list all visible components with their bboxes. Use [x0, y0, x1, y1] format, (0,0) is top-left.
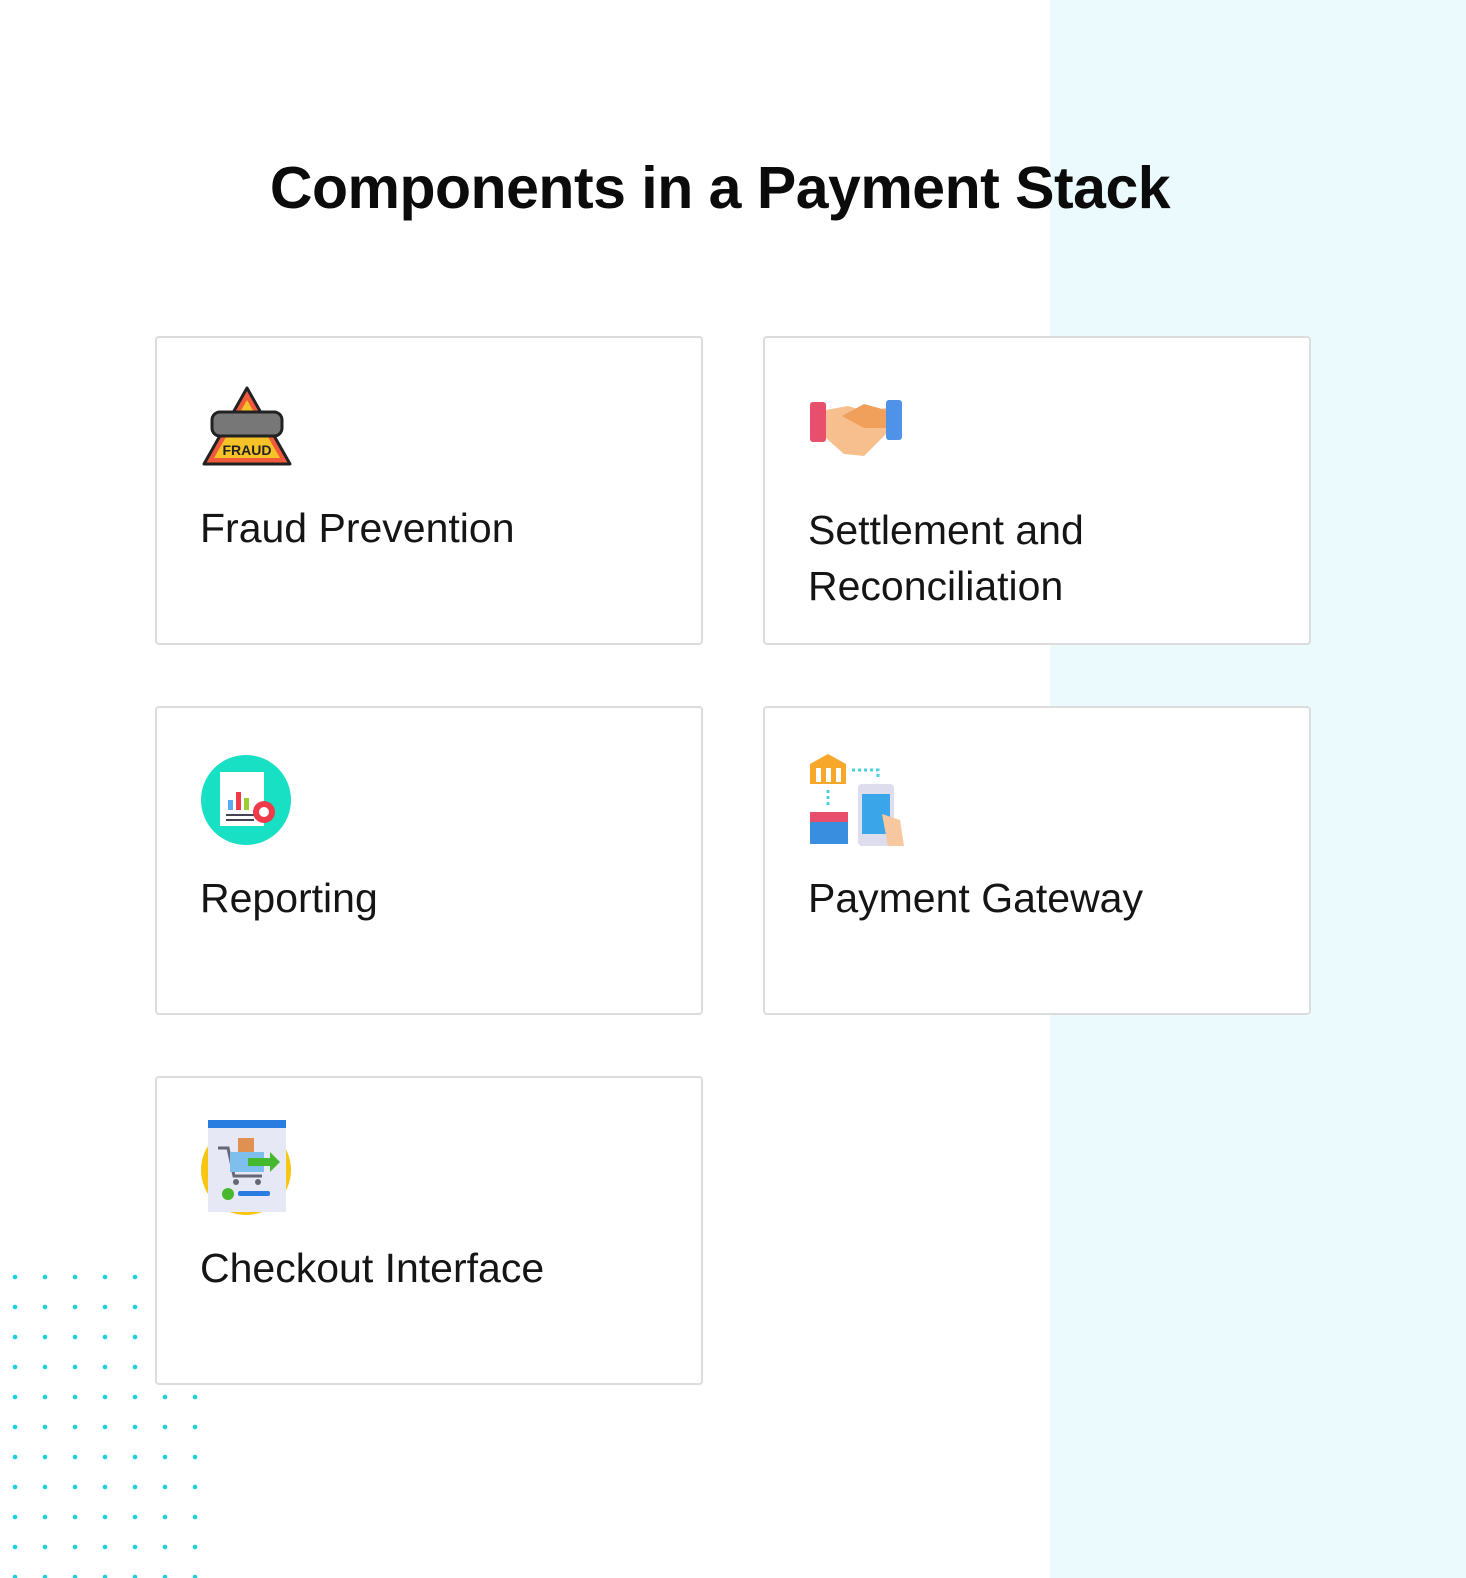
icon: report	[201, 755, 291, 845]
label: Checkout Interface	[200, 1245, 544, 1291]
label: Payment Gateway	[808, 875, 1143, 921]
panel: checkout interface	[155, 1076, 703, 1385]
panel: settlement	[763, 336, 1311, 645]
panel: reporting	[155, 706, 703, 1015]
label: Settlement and	[808, 507, 1084, 553]
icon: fraud sign	[202, 386, 292, 466]
title: Components in a Payment Stack	[270, 155, 1170, 221]
panel: fraud prevention	[155, 336, 703, 645]
icon: fraud sign: FRAUD	[222, 442, 272, 458]
label	[808, 507, 1084, 609]
label: Fraud Prevention	[200, 505, 515, 551]
label: Reconciliation	[808, 563, 1063, 609]
icon: handshake	[810, 400, 902, 456]
icon: gateway	[810, 754, 904, 846]
icon: checkout cart	[201, 1120, 291, 1215]
label: Reporting	[200, 875, 378, 921]
panel: payment gateway	[763, 706, 1311, 1015]
